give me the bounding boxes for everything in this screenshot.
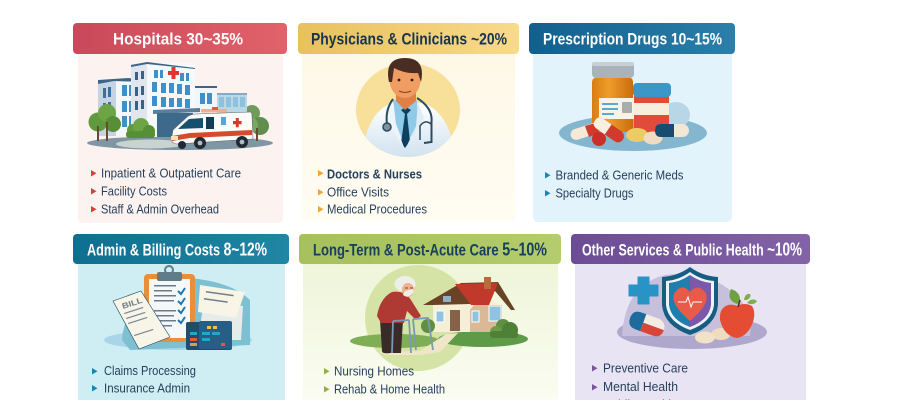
panel: admin and billing	[73, 234, 289, 400]
heading: admin and billing: Admin & Billing Costs 8~12%	[87, 240, 267, 260]
list: physicians: Office Visits	[327, 184, 389, 200]
list: admin and billing	[92, 363, 196, 396]
heading: other services: Other Services & Public Health ~10%	[582, 240, 802, 260]
icon: clipboard, bill and calculator	[104, 266, 252, 350]
list: hospitals: Staff & Admin Overhead	[101, 202, 219, 216]
list: hospitals: Facility Costs	[101, 184, 167, 198]
icon: shield, heart, pills and apple	[617, 267, 767, 349]
icon: pill bottles	[559, 62, 707, 151]
heading: other services	[571, 234, 810, 264]
list: physicians	[318, 166, 427, 216]
panel body	[303, 260, 558, 400]
icon: doctor	[356, 58, 460, 157]
list: physicians: Medical Procedures	[327, 202, 427, 216]
heading: physicians	[298, 23, 519, 54]
list: physicians: Doctors & Nurses	[327, 166, 422, 182]
list: hospitals: Inpatient & Outpatient Care	[101, 166, 241, 180]
panel: other services	[571, 234, 810, 400]
icon: senior with walker and house	[350, 265, 528, 371]
heading: long-term care	[299, 234, 561, 264]
list: long-term care	[324, 364, 445, 396]
panel: long-term care	[299, 234, 561, 400]
icon: clipboard, bill and calculator: BILL	[121, 296, 144, 311]
heading: prescription drugs	[529, 23, 735, 54]
panel body	[302, 50, 515, 222]
panel body	[533, 50, 732, 222]
panel: prescription drugs	[529, 23, 735, 222]
list: prescription drugs	[545, 168, 684, 200]
heading: hospitals: Hospitals 30~35%	[113, 30, 243, 48]
heading: hospitals	[73, 23, 287, 54]
list: long-term care: Rehab & Home Health	[334, 382, 445, 396]
panel: physicians	[298, 23, 519, 222]
heading: physicians: Physicians & Clinicians ~20%	[311, 30, 507, 48]
heading: prescription drugs: Prescription Drugs 10~15%	[543, 30, 722, 48]
list: admin and billing: Claims Processing	[104, 363, 196, 378]
panel body	[78, 260, 285, 400]
heading: long-term care: Long-Term & Post-Acute Care 5~10%	[313, 240, 547, 260]
panel body	[575, 260, 806, 400]
heading: admin and billing	[73, 234, 289, 264]
list: prescription drugs: Specialty Drugs	[556, 186, 634, 200]
panel: hospitals	[73, 23, 287, 223]
panel body	[78, 50, 283, 223]
list: other services: Mental Health	[603, 379, 678, 394]
list: hospitals	[91, 166, 241, 216]
icon: hospital and ambulance	[87, 62, 273, 150]
list: other services: Preventive Care	[603, 360, 688, 376]
list: long-term care: Nursing Homes	[334, 364, 414, 378]
list: other services	[592, 360, 688, 400]
list: prescription drugs: Branded & Generic Meds	[556, 168, 684, 182]
list: admin and billing: Insurance Admin	[104, 380, 190, 396]
